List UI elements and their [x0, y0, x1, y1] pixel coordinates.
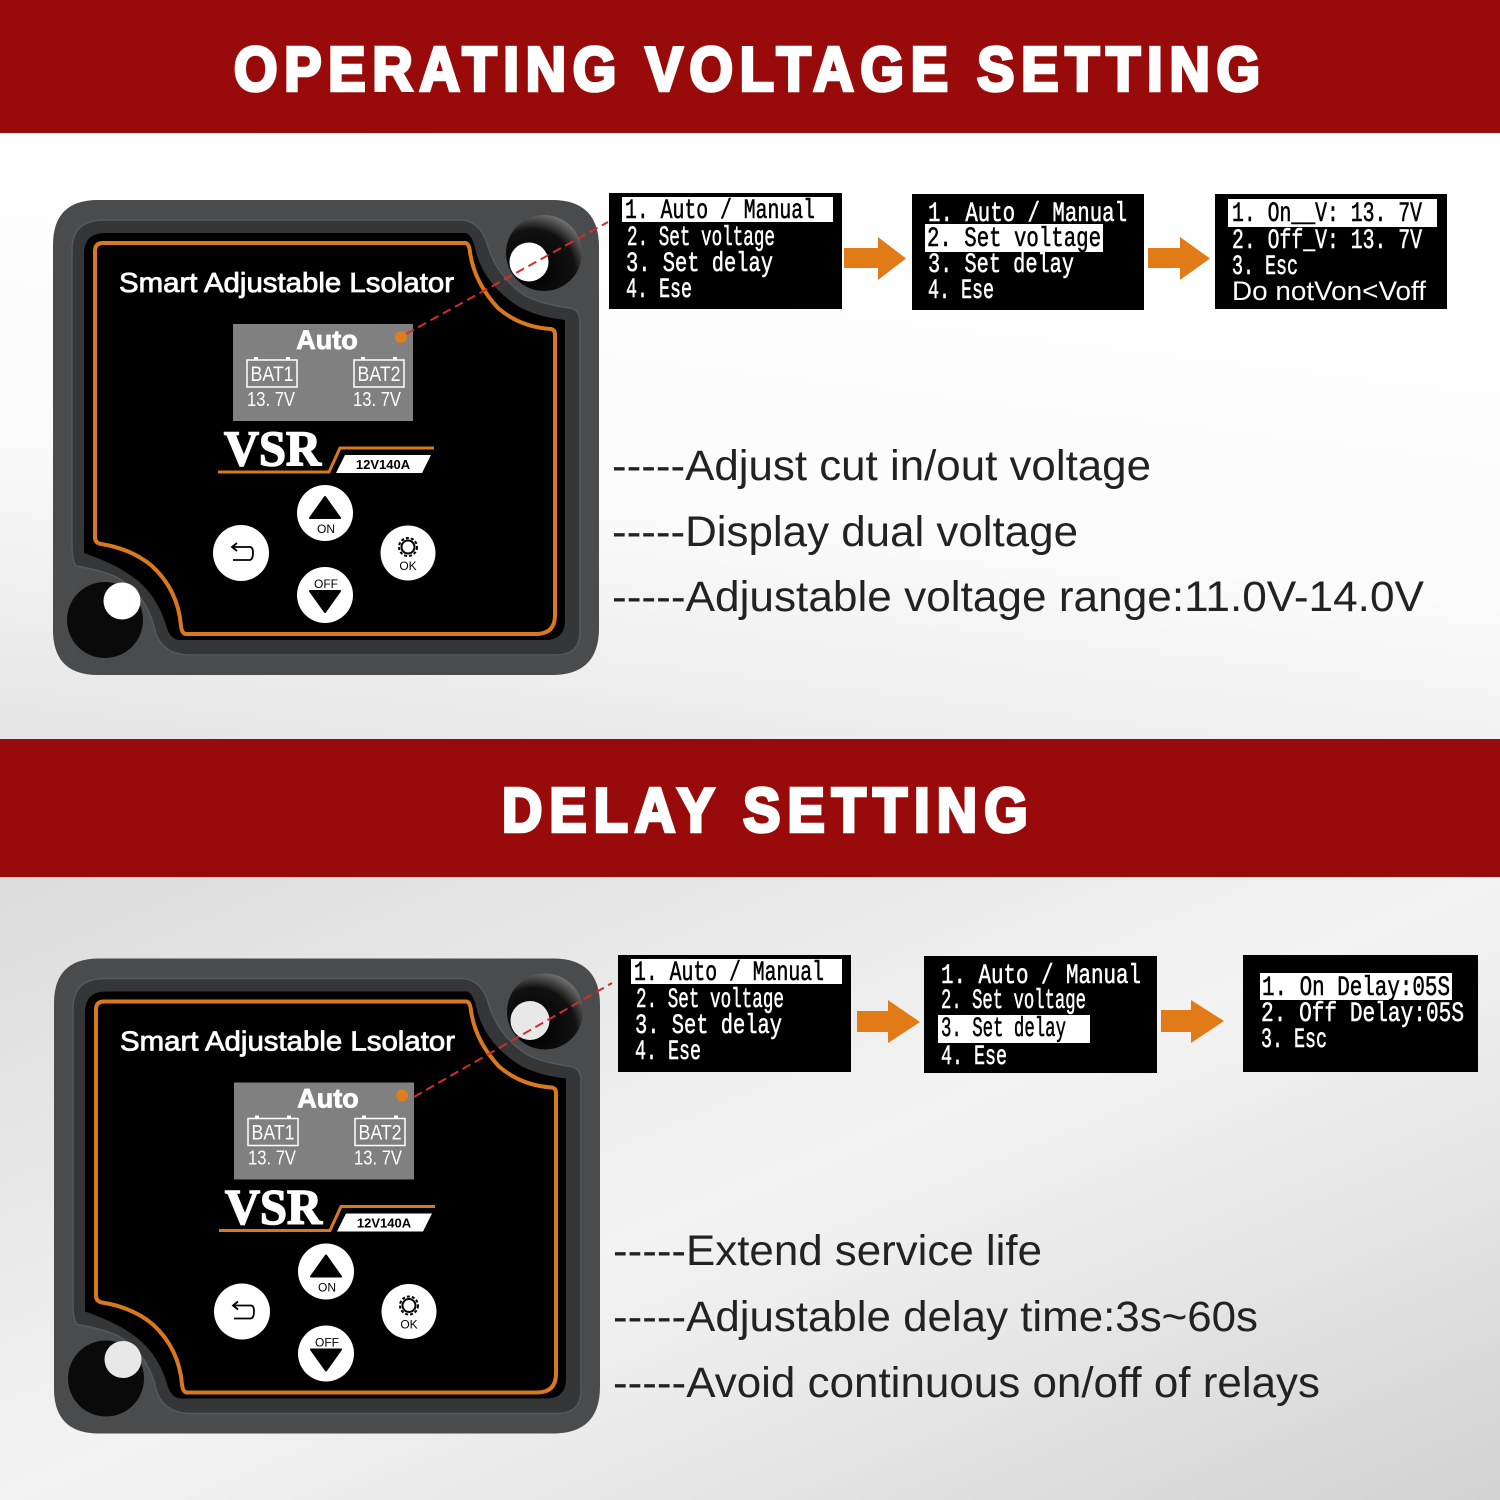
menu screen: voltage step 1: 1. Auto / Manual: [625, 196, 815, 227]
menu screen: delay step 3: 3. Esc: [1261, 1025, 1327, 1056]
menu screen: voltage step 1: 4. Ese: [626, 275, 692, 306]
menu screen: voltage step 3: 3. Esc: [1232, 252, 1298, 283]
menu screen: voltage step 2: [912, 194, 1144, 310]
orange outline: [96, 1002, 556, 1392]
button: on: ON: [318, 1280, 336, 1294]
screw hole: bottom left: [67, 582, 143, 658]
screw hole: top right: [507, 974, 583, 1050]
VSR logo: 12V140A: [356, 457, 411, 472]
status screen: 13. 7V: [354, 1148, 403, 1170]
menu screen: voltage step 2: 1. Auto / Manual: [928, 199, 1127, 230]
status screen: 13. 7V: [248, 1148, 297, 1170]
VSR logo: VSR: [225, 1178, 323, 1234]
VSR logo: [219, 1178, 435, 1234]
product name: Smart Adjustable Lsolator: [119, 267, 454, 298]
button: off: OFF: [314, 577, 338, 591]
status screen: BAT2: [358, 363, 400, 386]
menu screen: delay step 1: 2. Set voltage: [636, 985, 784, 1016]
status screen: BAT2: [358, 1122, 402, 1144]
button: on: [297, 485, 353, 541]
menu screen: voltage step 3: [1215, 194, 1447, 309]
screw hole: bottom left: [68, 1340, 144, 1416]
feature list: delay: [613, 1227, 1320, 1407]
menu screen: voltage step 1: 2. Set voltage: [627, 223, 775, 254]
screw hole: top right: [506, 215, 582, 291]
feature list: voltage: -----Adjust cut in/out voltage: [612, 442, 1151, 490]
feature list: delay: -----Extend service life: [613, 1227, 1042, 1275]
feature list: delay: -----Adjustable delay time:3s~60s: [613, 1293, 1258, 1341]
device: voltage section isolator: [53, 200, 599, 675]
device shell: [54, 958, 600, 1434]
device: delay section isolator: [54, 958, 600, 1434]
menu screen: delay step 3: [1243, 955, 1478, 1072]
button: back: [214, 1284, 270, 1340]
button: off: OFF: [315, 1336, 339, 1350]
heading band: operating voltage setting: OPERATING VOLTAGE SETTING: [234, 36, 1260, 104]
button: back: [213, 525, 269, 581]
menu screen: voltage step 3: 1. On__V: 13. 7V: [1232, 199, 1422, 230]
feature list: voltage: -----Adjustable voltage range:11.0V-14.0V: [612, 573, 1424, 621]
menu screen: voltage step 1: [609, 193, 842, 309]
heading band: operating voltage setting: [0, 0, 1500, 133]
button: off: [297, 567, 353, 623]
menu screen: delay step 2: 3. Set delay: [941, 1014, 1066, 1045]
feature list: voltage: [612, 442, 1424, 621]
feature list: voltage: -----Display dual voltage: [612, 508, 1078, 556]
orange outline: [95, 243, 555, 634]
menu screen: delay step 2: [924, 956, 1157, 1073]
button: on: [298, 1244, 354, 1300]
status screen: BAT1: [250, 363, 294, 386]
menu screen: voltage step 3: 2. Off_V: 13. 7V: [1232, 226, 1422, 257]
menu screen: delay step 2: 1. Auto / Manual: [941, 961, 1141, 992]
arrow: [1161, 1000, 1224, 1043]
status screen: Auto: [297, 1084, 359, 1114]
device shell: [53, 200, 599, 675]
menu screen: delay step 1: [618, 955, 851, 1072]
menu screen: voltage step 2: 2. Set voltage: [927, 224, 1101, 255]
button: ok: OK: [399, 559, 417, 573]
black control panel: [84, 233, 565, 640]
callout line: delay section: [414, 983, 612, 1097]
status screen: BAT1: [252, 1122, 294, 1144]
arrow: [844, 237, 906, 280]
status screen: 13. 7V: [247, 389, 296, 411]
product name: Smart Adjustable Lsolator: [120, 1026, 455, 1056]
menu screen: delay step 2: 4. Ese: [941, 1042, 1007, 1073]
menu screen: voltage step 3: Do notVon<Voff: [1232, 276, 1427, 306]
button: ok: [382, 1284, 436, 1339]
heading band: delay setting: DELAY SETTING: [502, 777, 1028, 845]
status screen: [234, 1082, 414, 1180]
menu screen: delay step 2: 2. Set voltage: [941, 986, 1086, 1017]
button: ok: [380, 526, 436, 580]
VSR logo: [218, 420, 434, 476]
heading band: delay setting: [0, 739, 1500, 877]
VSR logo: VSR: [224, 420, 322, 476]
black control panel: [85, 992, 566, 1398]
arrow: [1148, 237, 1210, 280]
arrow: [857, 1000, 920, 1043]
status screen: [233, 324, 413, 421]
VSR logo: 12V140A: [357, 1216, 412, 1230]
menu screen: voltage step 2: 4. Ese: [928, 276, 994, 307]
button: off: [298, 1326, 354, 1382]
menu screen: voltage step 2: 3. Set delay: [928, 250, 1074, 281]
feature list: delay: -----Avoid continuous on/off of relays: [613, 1359, 1320, 1407]
button: on: ON: [317, 522, 335, 536]
menu screen: voltage step 1: 3. Set delay: [626, 249, 773, 280]
status screen: Auto: [296, 325, 358, 355]
menu screen: delay step 1: 4. Ese: [635, 1037, 701, 1068]
callout line: voltage section: [406, 222, 608, 334]
button: ok: OK: [400, 1318, 418, 1332]
menu screen: delay step 1: 1. Auto / Manual: [634, 958, 824, 989]
status screen: 13. 7V: [353, 389, 402, 411]
menu screen: delay step 1: 3. Set delay: [635, 1011, 782, 1042]
